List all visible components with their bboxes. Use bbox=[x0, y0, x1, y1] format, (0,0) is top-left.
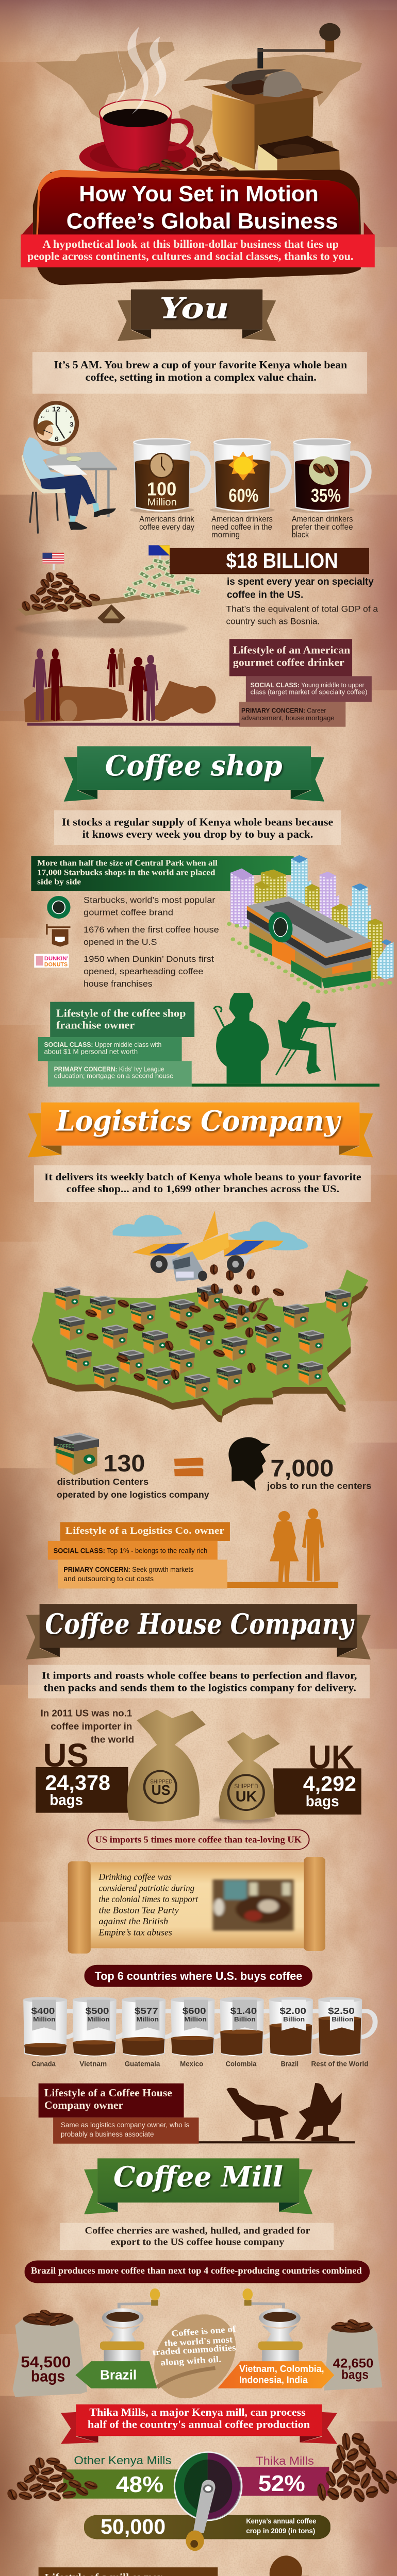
stat: Brazil 54,500 bags bbox=[21, 2353, 71, 2385]
heading ribbon: Coffee House Company bbox=[26, 1604, 371, 1659]
lifestyle panel: logistics company owner bbox=[48, 1522, 230, 1588]
heading ribbon: Coffee shop bbox=[64, 746, 324, 802]
stat mug: 60%: morning bbox=[211, 530, 240, 539]
pill: 50,000 tons: 50,000 bbox=[101, 2516, 166, 2538]
lifestyle panel: mill owner bbox=[39, 2567, 228, 2576]
lifestyle panel: coffee house company owner bbox=[39, 2083, 198, 2144]
intro text panel: coffee, setting in motion a complex value chain. bbox=[85, 371, 317, 383]
fact: 1676 coffee house sign: 1676 when the first coffee house bbox=[84, 925, 219, 935]
stat: Brazil 54,500 bags: 54,500 bbox=[21, 2353, 71, 2371]
lifestyle panel: coffee shop franchise owner bbox=[38, 1002, 194, 1087]
lifestyle panel: coffee shop franchise owner: education; mortgage on a second house bbox=[54, 1073, 173, 1080]
intro text panel: export to the US coffee house company bbox=[111, 2236, 285, 2247]
intro text panel: It delivers its weekly batch of Kenya whole beans to your favorite bbox=[44, 1171, 361, 1182]
scroll: colonial coffee history: Drinking coffee was bbox=[98, 1872, 172, 1882]
stat: others 42,650 bags: 42,650 bbox=[333, 2356, 373, 2370]
callout: Brazil produces more bbox=[25, 2260, 370, 2283]
icon: loose coffee beans bbox=[186, 144, 241, 176]
pill: 50,000 tons: Kenya’s annual coffee bbox=[246, 2517, 316, 2526]
silhouettes: executives in chairs bbox=[198, 2083, 355, 2143]
lifestyle panel: American coffee drinker bbox=[229, 639, 372, 727]
callout: Brazil produces more: Brazil produces more coffee than next top 4 coffee-producing countries combined bbox=[31, 2266, 362, 2276]
fact: 1950 Dunkin Donuts: 1950 when Dunkin’ Donuts first bbox=[84, 954, 214, 964]
silhouette: mill owner with bowler hat and pipe bbox=[221, 2555, 365, 2576]
fact: Starbucks: gourmet coffee brand bbox=[84, 908, 173, 917]
lifestyle panel: logistics company owner: Lifestyle of a Logistics Co. owner bbox=[65, 1525, 224, 1536]
bar: other Kenya mills 48% bbox=[63, 2454, 183, 2499]
chart: coffee purchases by country shown as mugs: $2.50 bbox=[328, 2007, 355, 2016]
icon: wall clock bbox=[34, 401, 79, 446]
chart: coffee purchases by country shown as mugs: $400 bbox=[31, 2007, 55, 2016]
fact: 1950 Dunkin Donuts bbox=[34, 954, 214, 988]
lifestyle panel: coffee house company owner: Same as logistics company owner, who is bbox=[61, 2121, 189, 2129]
intro text panel: Coffee cherries are washed, hulled, and graded for bbox=[85, 2225, 310, 2236]
chart: grinder dial of mill share bbox=[63, 2452, 330, 2551]
icon: wall clock: 4 bbox=[69, 431, 71, 434]
icon: wall clock: 11 bbox=[45, 410, 49, 413]
silhouettes: logistics owners bbox=[227, 1509, 338, 1588]
lifestyle panel: coffee shop franchise owner: Lifestyle of the coffee shop bbox=[56, 1007, 186, 1019]
stat: UK imports: 4,292 bbox=[303, 1772, 356, 1795]
bar: Thika Mills 52% bbox=[236, 2455, 329, 2496]
stat mug: 60%: 60% bbox=[228, 485, 258, 506]
header section bbox=[21, 23, 375, 341]
section: Logistics Company bbox=[26, 1103, 373, 1659]
icon: wall clock: 2 bbox=[70, 415, 72, 419]
fact: Starbucks: Starbucks, world’s most popular bbox=[84, 895, 215, 905]
intro text panel bbox=[60, 2223, 334, 2250]
chart: coffee purchases by country shown as mugs: $1.40 bbox=[230, 2007, 257, 2016]
section: Coffee House Company bbox=[6, 1665, 397, 2576]
stat: US imports: In 2011 US was no.1 bbox=[41, 1708, 132, 1719]
stat: others 42,650 bags bbox=[333, 2356, 373, 2382]
chart: coffee purchases by country shown as mugs: Colombia bbox=[226, 2060, 257, 2068]
icon: grinder crank handle bbox=[186, 2480, 215, 2551]
heading ribbon: Coffee shop: Coffee shop bbox=[105, 750, 283, 782]
chart: coffee purchases by country shown as mugs: $577 bbox=[135, 2007, 158, 2016]
stat mug: 100 million: coffee every day bbox=[139, 522, 195, 532]
heading ribbon: You bbox=[118, 290, 276, 341]
icon: left grinder mill bbox=[100, 2289, 160, 2362]
bar: Thika Mills 52%: Thika Mills bbox=[256, 2455, 314, 2468]
intro text panel bbox=[32, 352, 367, 394]
chart: coffee purchases by country shown as mugs: Mexico bbox=[180, 2060, 203, 2068]
callout: US imports 5 times more bbox=[88, 1829, 309, 1850]
fact: 1950 Dunkin Donuts: DONUTS bbox=[44, 961, 68, 968]
lifestyle panel: American coffee drinker: advancement, house mortgage bbox=[241, 715, 335, 722]
stat mug: 35%: prefer their coffee bbox=[292, 522, 353, 532]
title banner bbox=[21, 170, 375, 285]
lifestyle panel: coffee shop franchise owner: PRIMARY CONCERN: Kids’ Ivy League bbox=[54, 1065, 164, 1073]
label pill: top 6 countries bbox=[85, 1965, 312, 1987]
stat: UK imports: UK bbox=[308, 1738, 355, 1775]
icon: falling coffee beans bbox=[84, 1264, 286, 1383]
callout: US imports 5 times more: US imports 5 times more coffee than tea-loving UK bbox=[95, 1835, 302, 1845]
callout: coffee bean commodity fact bbox=[139, 2303, 251, 2410]
world map backdrop bbox=[36, 42, 362, 154]
bar: Thika Mills 52%: 52% bbox=[258, 2471, 305, 2496]
title text: Coffee’s Global Business bbox=[67, 209, 338, 233]
stat mug: 100 million bbox=[129, 438, 208, 532]
stat: $18 billion: $18 BILLION bbox=[226, 549, 338, 572]
lifestyle panel: logistics company owner: and outsourcing to cut costs bbox=[63, 1575, 154, 1583]
callout: coffee bean commodity fact: traded commodities bbox=[152, 2343, 236, 2358]
lifestyle panel: American coffee drinker: gourmet coffee drinker bbox=[233, 656, 344, 668]
stat: US imports: the world bbox=[91, 1735, 134, 1745]
icon: US burlap sack: SHIPPED bbox=[150, 1778, 172, 1785]
label arrow: Brazil: Brazil bbox=[100, 2367, 137, 2382]
title text: How You Set in Motion bbox=[79, 181, 319, 206]
illustration: isometric city with coffee shop bbox=[229, 855, 395, 993]
scroll: colonial coffee history: Empire’s tax abuses bbox=[98, 1927, 172, 1938]
ribbon: Thika Mills fact: half of the country's annual coffee production bbox=[88, 2418, 310, 2430]
fact: 1676 coffee house sign bbox=[47, 924, 219, 947]
stat mug: 60%: need coffee in the bbox=[211, 522, 272, 532]
chart: coffee purchases by country shown as mugs: Billion bbox=[234, 2016, 256, 2023]
lifestyle panel: coffee house company owner: probably a business associate bbox=[61, 2130, 154, 2139]
stat: US imports: bags bbox=[49, 1791, 83, 1808]
lifestyle panel: American coffee drinker: PRIMARY CONCERN: Career bbox=[241, 707, 326, 715]
stat: 130 distribution centers: 130 bbox=[103, 1450, 145, 1477]
icon: UK burlap sack bbox=[212, 1732, 280, 1823]
callout: Central Park comparison: side by side bbox=[37, 877, 81, 886]
stat mugs bbox=[129, 438, 369, 539]
icon: UK burlap sack: SHIPPED bbox=[234, 1783, 258, 1790]
icon: bean pile right bbox=[316, 2432, 397, 2505]
chart: coffee purchases by country shown as mugs: Million bbox=[137, 2016, 159, 2023]
stat: $18 billion bbox=[170, 548, 378, 626]
scroll: colonial coffee history bbox=[68, 1857, 325, 1954]
stat: $18 billion: coffee in the US. bbox=[227, 589, 303, 600]
callout: Central Park comparison: More than half the size of Central Park when all bbox=[37, 858, 218, 868]
icon: clouds bbox=[113, 1215, 308, 1250]
stat: $18 billion: country such as Bosnia. bbox=[226, 617, 320, 626]
icon: US burlap sack: US bbox=[152, 1783, 170, 1799]
image: coffee house painting bbox=[212, 1879, 294, 1930]
stat mug: 60%: American drinkers bbox=[211, 515, 273, 523]
lifestyle panel: American coffee drinker: Lifestyle of an American bbox=[233, 644, 350, 656]
stat: $18 billion: That’s the equivalent of total GDP of a bbox=[226, 604, 378, 614]
icon: equals sign bbox=[174, 1458, 203, 1476]
lifestyle panel: coffee shop franchise owner: about $1 M personal net worth bbox=[44, 1048, 138, 1056]
icon: UK burlap sack: UK bbox=[236, 1788, 257, 1805]
stat: 130 distribution centers: distribution Centers bbox=[57, 1477, 148, 1487]
subtitle text: A hypothetical look at this billion-dollar business that ties up bbox=[42, 238, 339, 250]
stat mug: 100 million: Million bbox=[147, 497, 177, 507]
icon: bean pile left bbox=[6, 2456, 100, 2503]
lifestyle panel: coffee shop franchise owner: SOCIAL CLASS: Upper middle class with bbox=[44, 1041, 161, 1049]
chart: coffee purchases by country shown as mugs: $500 bbox=[86, 2007, 109, 2016]
icon: wall clock: 3 bbox=[70, 421, 74, 428]
stat: UK imports bbox=[273, 1738, 361, 1815]
label arrow: Brazil bbox=[75, 2361, 157, 2388]
stat: 130 distribution centers: operated by one logistics company bbox=[57, 1490, 209, 1500]
icon: wall clock: 12 bbox=[52, 405, 61, 413]
illustration: seesaw balancing coffee beans and money bbox=[15, 545, 201, 637]
callout: coffee bean commodity fact: Coffee is one of bbox=[171, 2324, 237, 2339]
section: You bbox=[15, 352, 378, 727]
lifestyle panel: American coffee drinker: class (target market of specialty coffee) bbox=[251, 689, 368, 696]
stat: 7,000 jobs: jobs to run the centers bbox=[267, 1482, 371, 1492]
chart: coffee purchases by country shown as mugs: Billion bbox=[283, 2016, 305, 2023]
bar: other Kenya mills 48%: Other Kenya Mills bbox=[74, 2454, 171, 2467]
silhouettes: people, car and motorcycle bbox=[24, 648, 240, 726]
intro text panel: It imports and roasts whole coffee beans to perfection and flavor, bbox=[42, 1670, 357, 1681]
lifestyle panel: logistics company owner: SOCIAL CLASS: Top 1% - belongs to the really rich bbox=[54, 1547, 207, 1555]
stat mug: 35%: 35% bbox=[311, 485, 341, 506]
icon: wooden coffee grinder bbox=[203, 23, 340, 174]
chart: coffee purchases by country shown as mugs: Million bbox=[33, 2016, 56, 2023]
stat mug: 35%: American drinkers bbox=[292, 515, 353, 523]
stat: UK imports: bags bbox=[306, 1792, 339, 1810]
lifestyle panel: American coffee drinker: SOCIAL CLASS: Young middle to upper bbox=[251, 682, 365, 689]
label arrow: Vietnam, Colombia, Indonesia, India: Indonesia, India bbox=[239, 2375, 308, 2385]
chart: coffee purchases by country shown as mugs: Rest of the World bbox=[311, 2060, 369, 2068]
chart: coffee purchases by country shown as mugs: Brazil bbox=[281, 2060, 299, 2068]
fact: 1950 Dunkin Donuts: DUNKIN’ bbox=[44, 955, 69, 962]
stat: Brazil 54,500 bags: bags bbox=[31, 2368, 65, 2385]
scroll: colonial coffee history: considered patriotic during bbox=[99, 1883, 194, 1893]
pill: 50,000 tons: crop in 2009 (in tons) bbox=[246, 2527, 315, 2535]
lifestyle panel: coffee house company owner: Lifestyle of a Coffee House bbox=[44, 2087, 172, 2099]
callout: coffee bean commodity fact: the world's most bbox=[164, 2335, 233, 2349]
icon: right coffee sack bbox=[324, 2318, 383, 2391]
icon: US flag bbox=[42, 553, 64, 564]
stat mug: 35%: black bbox=[292, 530, 309, 539]
fact: 1676 coffee house sign: opened in the U.S bbox=[84, 937, 157, 947]
stat: 7,000 jobs: 7,000 bbox=[270, 1454, 334, 1481]
intro text panel bbox=[34, 1165, 371, 1202]
chart: coffee purchases by country shown as mugs: Billion bbox=[332, 2016, 353, 2023]
heading ribbon: Coffee Mill: Coffee Mill bbox=[113, 2161, 283, 2193]
bar: other Kenya mills 48%: 48% bbox=[116, 2472, 163, 2497]
label arrow: Vietnam, Colombia, Indonesia, India: Vietnam, Colombia, bbox=[239, 2364, 324, 2374]
stat: 130 distribution centers bbox=[54, 1432, 209, 1500]
ribbon: Thika Mills fact bbox=[61, 2404, 337, 2444]
stat: US imports: US bbox=[43, 1737, 89, 1774]
lifestyle panel: logistics company owner: PRIMARY CONCERN: Seek growth markets bbox=[63, 1566, 193, 1574]
chart: coffee purchases by country shown as mugs: Million bbox=[184, 2016, 207, 2023]
chart: coffee purchases by country shown as mugs bbox=[23, 1997, 375, 2068]
scroll: colonial coffee history: the Boston Tea Party bbox=[99, 1905, 179, 1916]
callout: Central Park comparison bbox=[31, 856, 294, 891]
icon: red coffee cup with steam bbox=[79, 27, 197, 176]
stat: US imports: coffee importer in bbox=[51, 1721, 132, 1732]
scroll: colonial coffee history: against the British bbox=[99, 1917, 168, 1927]
callout: Central Park comparison: 17,000 Starbucks shops in the world are placed bbox=[37, 868, 216, 877]
illustration: man drinking coffee at table bbox=[22, 420, 117, 534]
stat mug: 35% bbox=[290, 438, 369, 539]
heading ribbon: Coffee Mill bbox=[84, 2158, 312, 2214]
intro text panel: It’s 5 AM. You brew a cup of your favorite Kenya whole bean bbox=[54, 359, 348, 371]
silhouettes: old man and seated writer bbox=[192, 993, 379, 1087]
intro text panel bbox=[54, 810, 341, 845]
heading ribbon: You: You bbox=[159, 292, 229, 325]
lifestyle panel: coffee house company owner: Company owner bbox=[44, 2099, 123, 2111]
lifestyle panel: coffee shop franchise owner: franchise owner bbox=[56, 1019, 135, 1031]
map: United States with coffee shops bbox=[31, 1269, 369, 1422]
intro text panel bbox=[28, 1665, 370, 1698]
title text bbox=[67, 181, 338, 233]
scroll: colonial coffee history: the colonial times to support bbox=[99, 1894, 198, 1904]
intro text panel: coffee shop... and to 1,699 other branches across the US. bbox=[67, 1183, 339, 1195]
icon: wall clock: 6 bbox=[55, 435, 59, 443]
intro text panel: then packs and sends them to the logistics company for delivery. bbox=[43, 1682, 356, 1693]
heading ribbon: Logistics Company bbox=[28, 1103, 373, 1157]
chart: coffee purchases by country shown as mugs: $2.00 bbox=[279, 2007, 306, 2016]
chart: coffee purchases by country shown as mugs: Guatemala bbox=[125, 2060, 160, 2068]
pill: 50,000 tons bbox=[84, 2515, 330, 2539]
icon: right grinder mill bbox=[242, 2289, 303, 2362]
stat mug: 60% bbox=[210, 438, 289, 539]
icon: left coffee sack bbox=[13, 2308, 87, 2397]
stat: US imports bbox=[36, 1708, 134, 1813]
stat: others 42,650 bags: bags bbox=[341, 2367, 369, 2382]
intro text panel: it knows every week you drop by to buy a pack. bbox=[82, 828, 313, 840]
fact: Starbucks bbox=[47, 895, 215, 919]
label arrow: Vietnam, Colombia, Indonesia, India bbox=[218, 2361, 334, 2388]
intro text panel: It stocks a regular supply of Kenya whole beans because bbox=[62, 816, 333, 828]
fact: 1950 Dunkin Donuts: house franchises bbox=[84, 979, 153, 988]
chart: coffee purchases by country shown as mugs: $600 bbox=[183, 2007, 206, 2016]
label pill: top 6 countries: Top 6 countries where U.S. buys coffee bbox=[95, 1970, 302, 1982]
illustration: flying truck bbox=[132, 1211, 284, 1282]
stat: $18 billion: is spent every year on specialty bbox=[227, 577, 374, 587]
icon: Bosnia flag bbox=[148, 545, 170, 555]
chart: coffee purchases by country shown as mugs: Canada bbox=[31, 2060, 56, 2068]
subtitle text bbox=[27, 238, 354, 263]
stat: 7,000 jobs bbox=[228, 1437, 371, 1492]
icon: US burlap sack bbox=[127, 1709, 206, 1822]
icon: wall clock: 1 bbox=[65, 410, 68, 413]
stat mug: 100 million: Americans drink bbox=[139, 515, 194, 523]
stat mug: 100 million: 100 bbox=[147, 479, 176, 500]
heading ribbon: Logistics Company: Logistics Company bbox=[55, 1105, 341, 1137]
chart: coffee purchases by country shown as mugs: Million bbox=[87, 2016, 110, 2023]
callout: coffee bean commodity fact: along with oil. bbox=[160, 2354, 222, 2368]
section: Coffee shop bbox=[31, 746, 395, 1087]
chart: coffee purchases by country shown as mugs: Vietnam bbox=[79, 2060, 107, 2068]
ribbon: Thika Mills fact: Thika Mills, a major Kenya mill, can process bbox=[89, 2406, 306, 2418]
stat: US imports: 24,378 bbox=[45, 1771, 110, 1794]
fact: 1950 Dunkin Donuts: opened, spearheading coffee bbox=[84, 967, 203, 976]
icon: wall clock: 10 bbox=[41, 415, 45, 419]
